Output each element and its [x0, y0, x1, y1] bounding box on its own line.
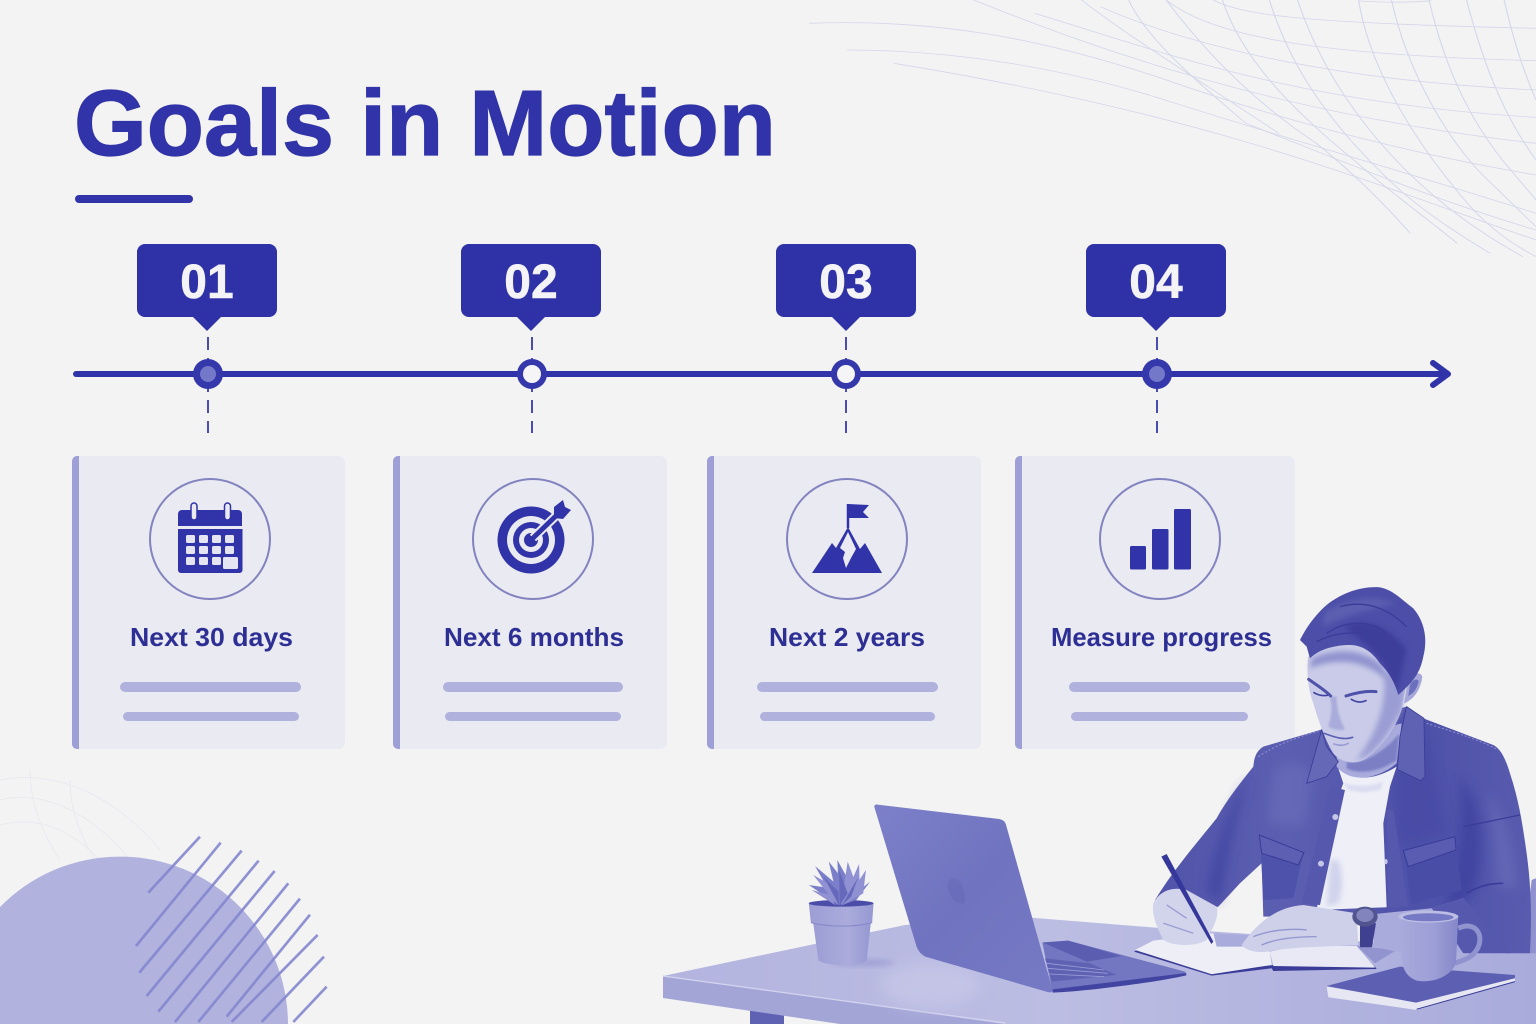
t-shirt — [1317, 763, 1397, 910]
placeholder text lines — [757, 682, 938, 721]
placeholder text lines — [120, 682, 301, 721]
shirt plackets — [1302, 787, 1408, 907]
milestone 02: 02 — [504, 256, 558, 309]
person — [1155, 587, 1536, 953]
desk scene — [663, 587, 1536, 1024]
label: measure progress: Measure progress — [1051, 622, 1272, 652]
title underline — [75, 195, 193, 203]
placeholder text lines — [1069, 682, 1250, 721]
left hand — [1153, 889, 1217, 945]
icon: target with arrow — [498, 500, 571, 574]
small notebook — [1327, 967, 1515, 1010]
plant in pot — [809, 860, 894, 966]
timeline — [76, 244, 1448, 433]
neck — [1337, 723, 1402, 778]
milestone 03 — [776, 244, 916, 433]
panel: next 2 years — [707, 456, 981, 749]
desk leg — [750, 1010, 784, 1024]
icon: bar chart — [1130, 509, 1191, 570]
milestone 02 — [461, 244, 601, 433]
forearm — [1373, 898, 1508, 953]
milestone 01 — [137, 244, 277, 433]
pen — [1161, 854, 1213, 944]
shirt shading — [1207, 723, 1520, 910]
right hand — [1242, 905, 1358, 952]
decorative circle and stripes — [0, 837, 327, 1024]
facial features — [1309, 679, 1376, 745]
person hands and watch — [1153, 854, 1510, 953]
panel: next 30 days — [72, 456, 345, 749]
face — [1307, 637, 1422, 762]
shirt — [1155, 707, 1531, 953]
panel: measure progress — [1015, 456, 1295, 749]
decorative mesh: lower left — [0, 770, 160, 860]
collar — [1307, 707, 1425, 783]
panel: next 6 months — [393, 456, 667, 749]
decorative mesh: top right — [809, 0, 1536, 257]
milestone 03: 03 — [819, 256, 873, 309]
pockets — [1259, 835, 1462, 904]
desk notebook — [1134, 933, 1397, 976]
desk surface — [663, 917, 1536, 1024]
hair — [1300, 587, 1425, 695]
label: next 6 months: Next 6 months — [444, 622, 624, 652]
timeline axis with arrow — [76, 363, 1448, 385]
chair back — [1523, 878, 1536, 953]
watch — [1360, 923, 1376, 947]
icon: calendar — [178, 503, 242, 573]
milestone 04: 04 — [1129, 256, 1183, 309]
icon: mountain with flag — [812, 504, 882, 573]
milestone 04 — [1086, 244, 1226, 433]
laptop — [874, 805, 1186, 993]
title: Goals in Motion — [74, 71, 776, 175]
label: next 2 years: Next 2 years — [769, 622, 925, 652]
placeholder text lines — [443, 682, 623, 721]
label: next 30 days: Next 30 days — [130, 622, 293, 652]
milestone 01: 01 — [180, 256, 234, 309]
coffee mug — [1398, 911, 1480, 981]
